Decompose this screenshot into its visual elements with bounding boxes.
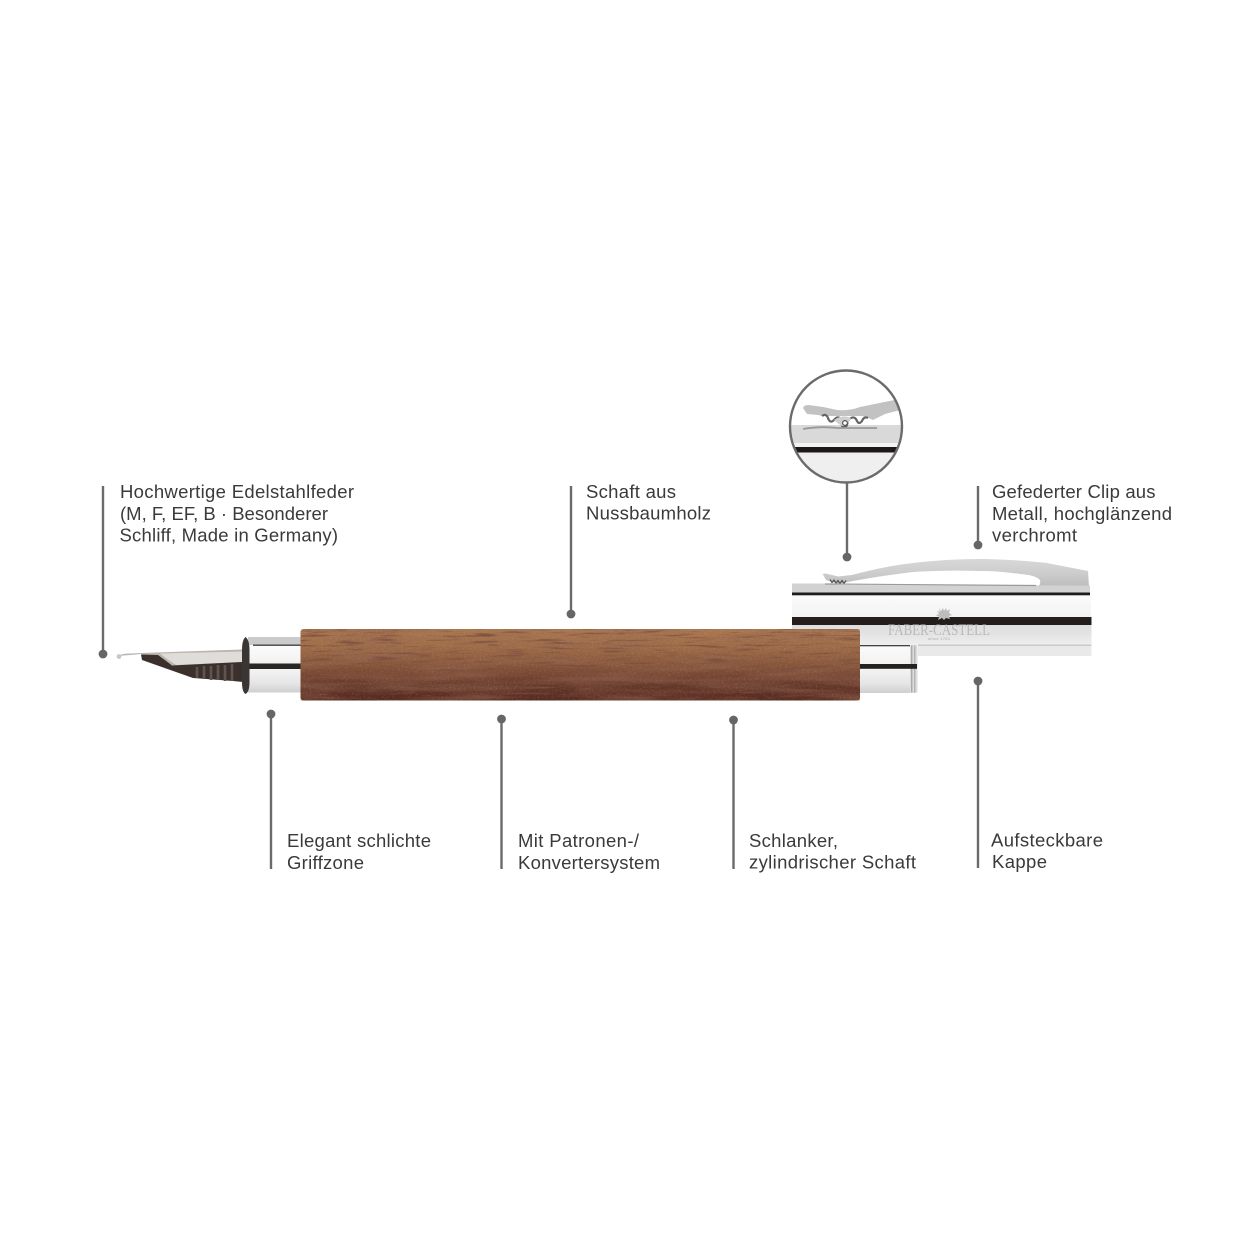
grip zone xyxy=(242,637,301,694)
callout: cap: Aufsteckbare xyxy=(991,830,1103,850)
callout: walnut barrel: Schaft aus xyxy=(586,481,676,502)
callout: spring clip: verchromt xyxy=(992,524,1077,546)
logo: FABER-CASTELL xyxy=(888,622,990,639)
callout: spring clip: Metall, hochglänzend xyxy=(992,503,1172,524)
callout: slim barrel: zylindrischer Schaft xyxy=(749,852,916,872)
callout: grip: Griffzone xyxy=(287,852,364,873)
callout: slim barrel xyxy=(729,716,916,872)
callout: grip xyxy=(267,710,431,873)
cap body xyxy=(792,584,1092,656)
callout: nib: (M, F, EF, B · Besonderer xyxy=(120,503,328,524)
barrel end section xyxy=(860,645,918,693)
callout: cartridge system: Mit Patronen-/ xyxy=(518,830,640,851)
callout: nib: Hochwertige Edelstahlfeder xyxy=(120,481,354,502)
callout: walnut barrel: Nussbaumholz xyxy=(586,502,711,524)
callout: nib xyxy=(99,481,354,658)
nib xyxy=(117,650,243,682)
callout: cap: Kappe xyxy=(992,851,1047,872)
fountain pen xyxy=(117,559,1092,700)
clip xyxy=(823,559,1089,587)
callout: slim barrel: Schlanker, xyxy=(749,830,838,851)
lens xyxy=(788,370,904,484)
callout: spring clip: Gefederter Clip aus xyxy=(992,481,1156,502)
callout: magnified clip detail xyxy=(788,370,904,561)
wooden barrel xyxy=(300,629,860,700)
callout: cap xyxy=(974,677,1103,872)
callout: grip: Elegant schlichte xyxy=(287,830,431,851)
callout: cartridge system xyxy=(497,715,660,873)
callout: cartridge system: Konvertersystem xyxy=(518,852,660,873)
callout: walnut barrel xyxy=(567,481,711,618)
logo xyxy=(888,608,990,641)
callout: spring clip xyxy=(974,481,1172,549)
cap xyxy=(792,559,1092,656)
logo: since 1761 xyxy=(928,636,951,641)
callout: nib: Schliff, Made in Germany) xyxy=(120,524,338,546)
